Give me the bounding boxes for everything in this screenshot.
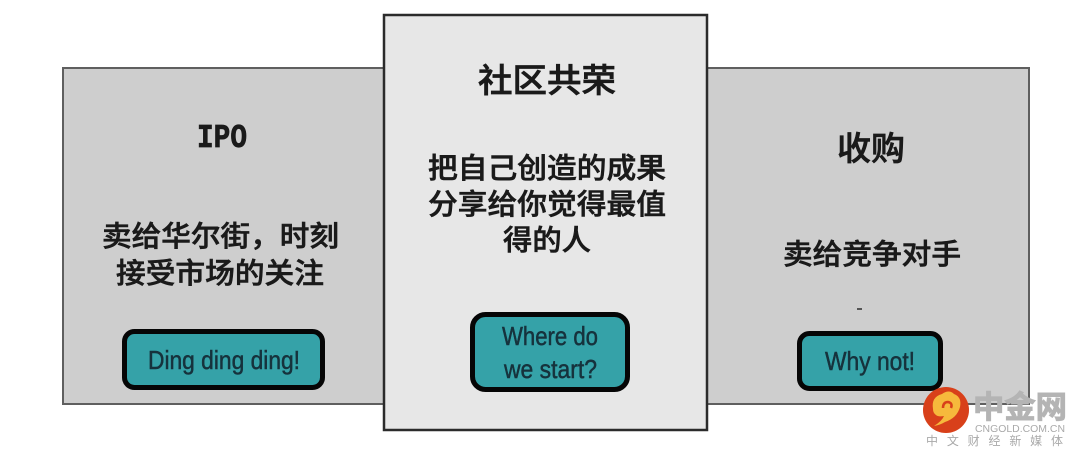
text: sell to Wall Street — [102, 221, 339, 290]
text: share your results: 得的人 — [503, 225, 591, 257]
text: share your results — [428, 153, 666, 257]
text: sell to competitor: 卖给竞争对手 — [783, 239, 961, 271]
watermark: tagline: 中文财经新媒体 — [926, 433, 1063, 448]
button: Why not — [800, 334, 940, 388]
heading: community: 社区共荣 — [478, 62, 616, 99]
dash — [857, 308, 862, 310]
button: Where do we start: Where do — [502, 321, 598, 351]
text: share your results: 把自己创造的成果 — [428, 153, 666, 185]
panel: acquisition — [706, 68, 1029, 404]
watermark: domain: CNGOLD.COM.CN — [975, 424, 1065, 435]
button: Where do we start — [472, 314, 628, 390]
watermark: CNGOLD logo — [923, 382, 1067, 448]
text: sell to Wall Street: 接受市场的关注 — [116, 258, 324, 290]
text: sell to Wall Street: 卖给华尔街，时刻 — [102, 221, 339, 253]
text: share your results: 分享给你觉得最值 — [428, 189, 666, 221]
button: Where do we start: we start? — [503, 354, 597, 384]
panel: community — [384, 15, 707, 430]
panel: IPO — [63, 68, 387, 404]
button: Ding ding ding — [124, 332, 322, 388]
button: Ding ding ding: Ding ding ding! — [148, 345, 300, 375]
button: Why not: Why not! — [825, 346, 915, 376]
watermark: brand name: 中金网 — [973, 382, 1067, 427]
heading: acquisition: 收购 — [837, 130, 905, 167]
heading: IPO: IPO — [197, 120, 247, 157]
icon: red circle with gold swirl — [923, 387, 969, 433]
